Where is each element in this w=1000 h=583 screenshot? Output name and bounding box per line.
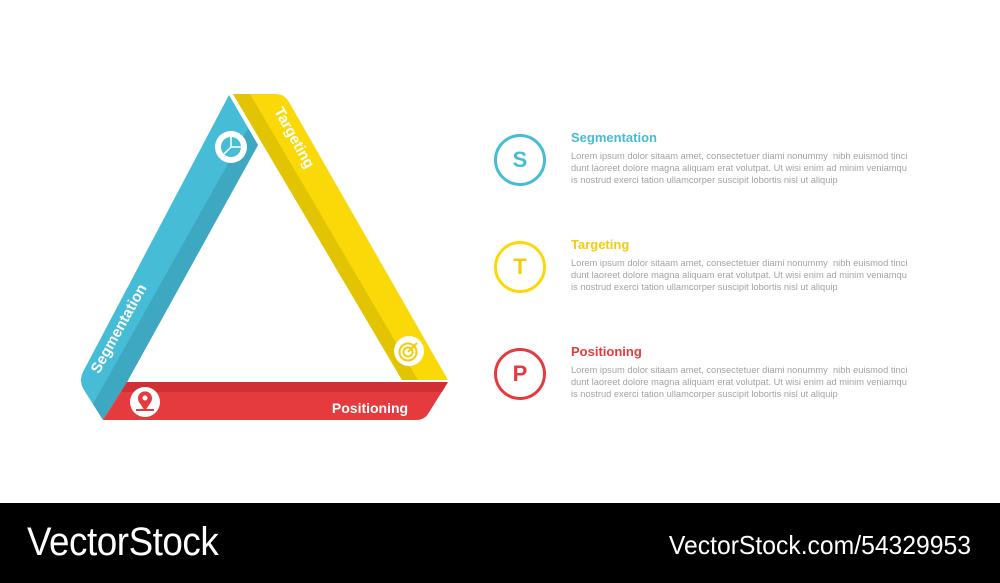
heading: Targeting: Targeting bbox=[571, 237, 629, 252]
text block bbox=[571, 365, 907, 399]
icon: pie chart bbox=[215, 131, 247, 163]
text block: is nostrud exerci tation ullamcorper suscipit lobortis nisl ut aliquip bbox=[571, 389, 838, 399]
footer bbox=[0, 503, 1000, 583]
label: Segmentation: Segmentation bbox=[88, 281, 151, 376]
icon: target bbox=[394, 336, 424, 366]
text block: Lorem ipsum dolor sitaam amet, consectetuer diami nonummy nibh euismod tinci bbox=[571, 151, 907, 161]
footer url: VectorStock.com/54329953 bbox=[669, 530, 971, 560]
row: positioning bbox=[494, 344, 907, 400]
triangle diagram bbox=[81, 94, 448, 420]
band: segmentation (blue) bbox=[81, 95, 258, 420]
text block: is nostrud exerci tation ullamcorper suscipit lobortis nisl ut aliquip bbox=[571, 175, 838, 185]
row: targeting bbox=[494, 237, 907, 293]
icon: map pin bbox=[130, 387, 160, 417]
text block: Lorem ipsum dolor sitaam amet, consectetuer diami nonummy nibh euismod tinci bbox=[571, 365, 907, 375]
label: Targeting: Targeting bbox=[270, 104, 318, 171]
circle: S bbox=[494, 134, 546, 186]
circle: T: T bbox=[513, 254, 527, 279]
text block: Lorem ipsum dolor sitaam amet, consectetuer diami nonummy nibh euismod tinci bbox=[571, 258, 907, 268]
text block: dunt laoreet dolore magna aliquam erat volutpat. Ut wisi enim ad minim veniamqu bbox=[571, 270, 907, 280]
heading: Positioning: Positioning bbox=[571, 344, 642, 359]
text block: dunt laoreet dolore magna aliquam erat volutpat. Ut wisi enim ad minim veniamqu bbox=[571, 377, 907, 387]
row: segmentation bbox=[494, 130, 907, 186]
text block bbox=[571, 151, 907, 185]
text block: dunt laoreet dolore magna aliquam erat volutpat. Ut wisi enim ad minim veniamqu bbox=[571, 163, 907, 173]
circle: S: S bbox=[513, 147, 527, 172]
heading: Segmentation: Segmentation bbox=[571, 130, 657, 145]
label: Positioning: Positioning bbox=[332, 400, 408, 416]
circle: P: P bbox=[513, 361, 527, 386]
text block: is nostrud exerci tation ullamcorper suscipit lobortis nisl ut aliquip bbox=[571, 282, 838, 292]
text block bbox=[571, 258, 907, 292]
band: targeting (yellow) bbox=[233, 94, 448, 380]
band: positioning (red) bbox=[103, 382, 448, 420]
footer brand: VectorStock bbox=[27, 520, 218, 564]
circle: T bbox=[494, 241, 546, 293]
circle: P bbox=[494, 348, 546, 400]
